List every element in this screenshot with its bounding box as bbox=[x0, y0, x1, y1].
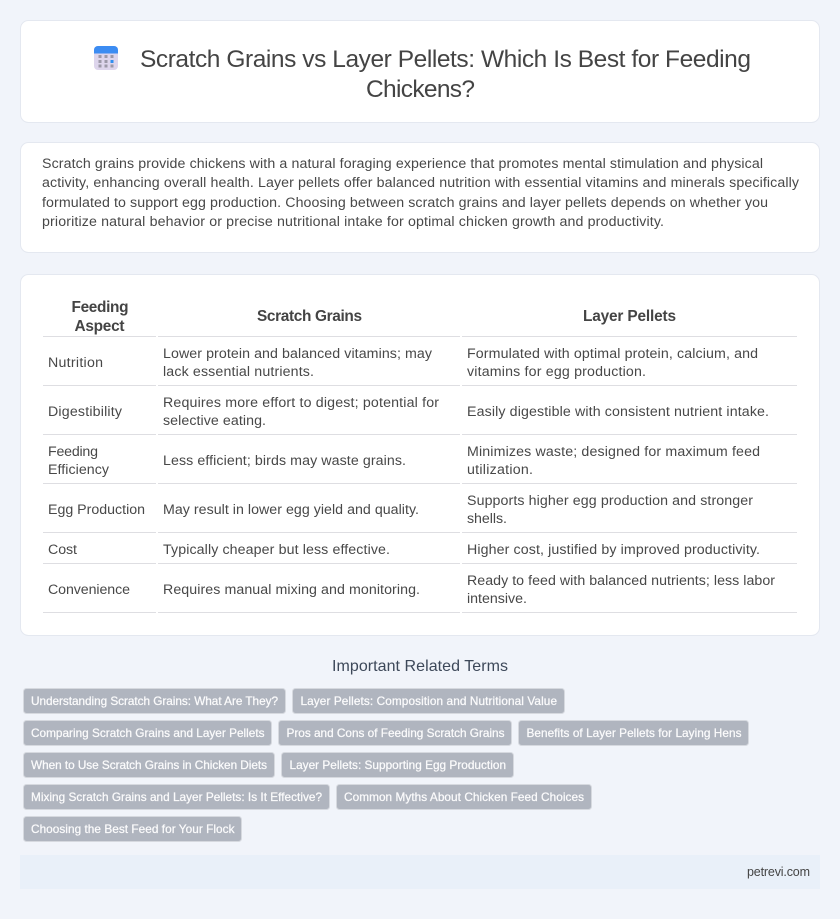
panel: header card bbox=[20, 20, 820, 122]
table row: egg production: May result in lower egg yield and quality. bbox=[163, 502, 419, 518]
chip row 5: Choosing the Best Feed for Your Flock bbox=[31, 822, 235, 836]
table row: digestibility: Easily digestible with consistent nutrient intake. bbox=[467, 404, 769, 420]
text block: introduction: activity, enhancing overall health. Layer pellets offer balanced nutrition with essential vitamins and minerals specifically bbox=[42, 175, 800, 191]
chip row 4: Mixing Scratch Grains and Layer Pellets: Is It Effective? bbox=[31, 790, 322, 804]
text block: introduction bbox=[42, 156, 800, 230]
chip row 2: Comparing Scratch Grains and Layer Pellets bbox=[31, 726, 265, 740]
table row: nutrition: Nutrition bbox=[48, 355, 103, 371]
table row: cost bbox=[48, 542, 760, 558]
table row: nutrition: Lower protein and balanced vitamins; may bbox=[163, 346, 433, 362]
chip row 4 bbox=[24, 784, 592, 810]
chip row 2: Benefits of Layer Pellets for Laying Hens bbox=[526, 726, 742, 740]
chip row 2: Pros and Cons of Feeding Scratch Grains bbox=[286, 726, 505, 740]
table row: feeding efficiency: Minimizes waste; designed for maximum feed bbox=[467, 444, 760, 460]
chip row 1 bbox=[24, 688, 564, 714]
chip row 4: Common Myths About Chicken Feed Choices bbox=[344, 790, 584, 804]
footer bar bbox=[20, 855, 820, 889]
table row: nutrition: lack essential nutrients. bbox=[163, 364, 314, 380]
table row: digestibility: selective eating. bbox=[163, 413, 266, 429]
table row: feeding efficiency: Efficiency bbox=[48, 462, 110, 478]
table header row: Aspect bbox=[74, 318, 124, 335]
chip row 2 bbox=[24, 720, 748, 746]
table row: feeding efficiency: Feeding bbox=[48, 444, 98, 460]
related term chips bbox=[24, 688, 748, 842]
text block: introduction: prioritize natural behavior or precise nutritional intake for optimal chicken growth and productivity. bbox=[42, 214, 664, 230]
table row: egg production: Supports higher egg production and stronger bbox=[467, 493, 753, 509]
table header row: Feeding bbox=[72, 299, 128, 316]
table header row: Scratch Grains bbox=[257, 308, 362, 325]
table row: digestibility bbox=[48, 395, 769, 429]
heading: important related terms: Important Related Terms bbox=[332, 658, 508, 675]
text block: introduction: formulated to support egg production. Choosing between scratch grains and layer pellets depends on whether you bbox=[42, 195, 768, 211]
table row: convenience bbox=[48, 573, 775, 607]
table row: digestibility: Requires more effort to digest; potential for bbox=[163, 395, 439, 411]
table row: cost: Typically cheaper but less effective. bbox=[163, 542, 390, 558]
chip row 3 bbox=[24, 752, 514, 778]
table row: nutrition: Formulated with optimal protein, calcium, and bbox=[467, 346, 758, 362]
table row: feeding efficiency bbox=[48, 444, 760, 478]
text block: introduction: Scratch grains provide chickens with a natural foraging experience that promotes mental stimulation and physical bbox=[42, 156, 763, 172]
table row: digestibility: Digestibility bbox=[48, 404, 123, 420]
table header row: Layer Pellets bbox=[583, 308, 676, 325]
table row: nutrition: vitamins for egg production. bbox=[467, 364, 646, 380]
panel: intro text card bbox=[20, 142, 820, 252]
title: Scratch Grains vs Layer Pellets: Which Is Best for Feeding bbox=[140, 46, 751, 73]
table header row bbox=[72, 299, 676, 335]
table row: convenience: Convenience bbox=[48, 582, 130, 598]
table row: feeding efficiency: Less efficient; birds may waste grains. bbox=[163, 453, 406, 469]
title bbox=[140, 46, 751, 103]
table row rules bbox=[43, 336, 797, 613]
chip row 1: Understanding Scratch Grains: What Are They? bbox=[31, 694, 278, 708]
table row: egg production bbox=[48, 493, 753, 527]
table row: cost: Higher cost, justified by improved productivity. bbox=[467, 542, 760, 558]
chip row 3: When to Use Scratch Grains in Chicken Diets bbox=[31, 758, 267, 772]
panel: comparison table card bbox=[20, 274, 820, 636]
chip row 3: Layer Pellets: Supporting Egg Production bbox=[290, 758, 506, 772]
table row: egg production: Egg Production bbox=[48, 502, 145, 518]
icon: calendar bbox=[94, 46, 118, 70]
chip row 5 bbox=[24, 816, 242, 842]
table row: nutrition bbox=[48, 346, 758, 380]
table row: egg production: shells. bbox=[467, 511, 507, 527]
chip row 1: Layer Pellets: Composition and Nutritional Value bbox=[300, 694, 557, 708]
table row: cost: Cost bbox=[48, 542, 77, 558]
table row: convenience: Requires manual mixing and monitoring. bbox=[163, 582, 420, 598]
footer text: site name: petrevi.com bbox=[747, 865, 810, 879]
table row: feeding efficiency: utilization. bbox=[467, 462, 533, 478]
table row: convenience: intensive. bbox=[467, 591, 527, 607]
table row: convenience: Ready to feed with balanced nutrients; less labor bbox=[467, 573, 775, 589]
title: Chickens? bbox=[366, 76, 475, 103]
